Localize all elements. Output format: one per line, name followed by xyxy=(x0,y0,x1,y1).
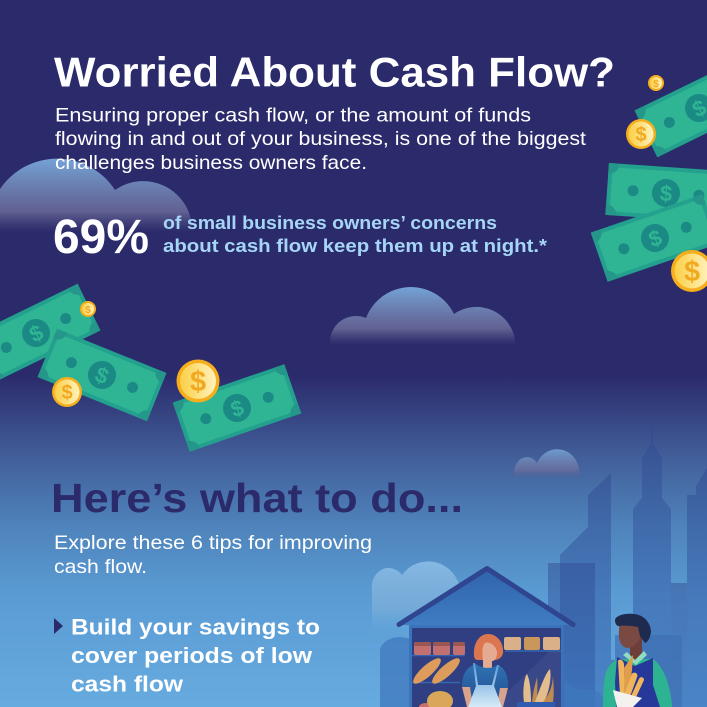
statistic caption xyxy=(163,212,548,256)
coin: large right: $ xyxy=(684,256,700,288)
bill: left A xyxy=(0,269,115,397)
collar xyxy=(623,651,647,665)
round bread xyxy=(419,703,433,707)
bill: top right A xyxy=(620,44,707,172)
bill: right C xyxy=(577,180,707,296)
baker apron xyxy=(468,663,502,707)
baker xyxy=(462,634,508,707)
baker shirt xyxy=(462,664,508,707)
coin: large centre: $ xyxy=(190,366,206,398)
coin: large right xyxy=(671,250,707,292)
tip 1: cover periods of low xyxy=(71,643,313,668)
tip 1 xyxy=(71,614,320,696)
baguette loaves xyxy=(410,655,463,687)
baker arms xyxy=(462,687,508,707)
statistic: 69% xyxy=(53,211,548,264)
red loaves xyxy=(414,642,465,655)
coin: medium left xyxy=(52,377,82,407)
bill: left B: $ xyxy=(91,362,112,389)
coin: medium top right: $ xyxy=(635,124,647,146)
bill: left A: $ xyxy=(25,320,47,347)
customer xyxy=(603,614,672,707)
tips introduction xyxy=(54,532,372,578)
baguettes xyxy=(618,655,645,699)
intro paragraph: flowing in and out of your business, is one of the biggest xyxy=(55,128,587,150)
intro paragraph: Ensuring proper cash flow, or the amount of funds xyxy=(55,104,531,126)
bill: centre: $ xyxy=(227,395,247,422)
baker face xyxy=(482,643,497,668)
statistic caption: about cash flow keep them up at night.* xyxy=(163,235,548,256)
bill: left B xyxy=(23,314,181,436)
coin: small left xyxy=(80,301,96,317)
intro paragraph xyxy=(55,104,587,174)
tips introduction: cash flow. xyxy=(54,556,147,578)
jacket xyxy=(603,659,672,707)
paper wrap xyxy=(613,690,642,707)
baker hair xyxy=(474,634,503,660)
shop roof xyxy=(397,566,575,625)
shelves xyxy=(412,651,561,682)
statistic: 69%: 69% xyxy=(53,211,149,264)
bread basket xyxy=(517,669,555,707)
face xyxy=(619,624,640,648)
statistic caption: of small business owners’ concerns xyxy=(163,212,497,233)
vest xyxy=(615,657,660,707)
coin: small top right: $ xyxy=(653,79,659,90)
cloud: lower behind shop xyxy=(380,637,606,707)
cloud: small skyline xyxy=(500,449,579,478)
cloud: centre xyxy=(330,287,515,345)
icon: tip arrow xyxy=(54,618,63,634)
cloud behind shop xyxy=(372,561,460,640)
coin: medium left: $ xyxy=(61,382,73,404)
tips introduction: Explore these 6 tips for improving xyxy=(54,532,372,554)
tip 1: Build your savings to xyxy=(71,614,320,640)
tan loaves xyxy=(504,637,560,650)
skyline xyxy=(548,424,707,707)
coin: small top right xyxy=(648,75,664,91)
bakery shop xyxy=(397,566,575,707)
coin: small left: $ xyxy=(85,305,91,316)
bill: right C: $ xyxy=(645,225,665,252)
hair xyxy=(615,614,651,643)
bill: right B xyxy=(594,151,707,235)
bill: right B: $ xyxy=(659,181,673,206)
shop body xyxy=(409,625,564,707)
intro paragraph: challenges business owners face. xyxy=(55,152,367,174)
neck xyxy=(630,636,642,663)
heading: here's what to do: Here’s what to do... xyxy=(51,475,463,521)
cloud: top left xyxy=(0,159,192,232)
coin: large centre xyxy=(176,360,220,402)
coin: medium top right xyxy=(626,119,656,149)
tip 1: cash flow xyxy=(71,672,184,696)
title: Worried About Cash Flow? xyxy=(54,48,615,96)
bill: centre xyxy=(159,350,315,466)
